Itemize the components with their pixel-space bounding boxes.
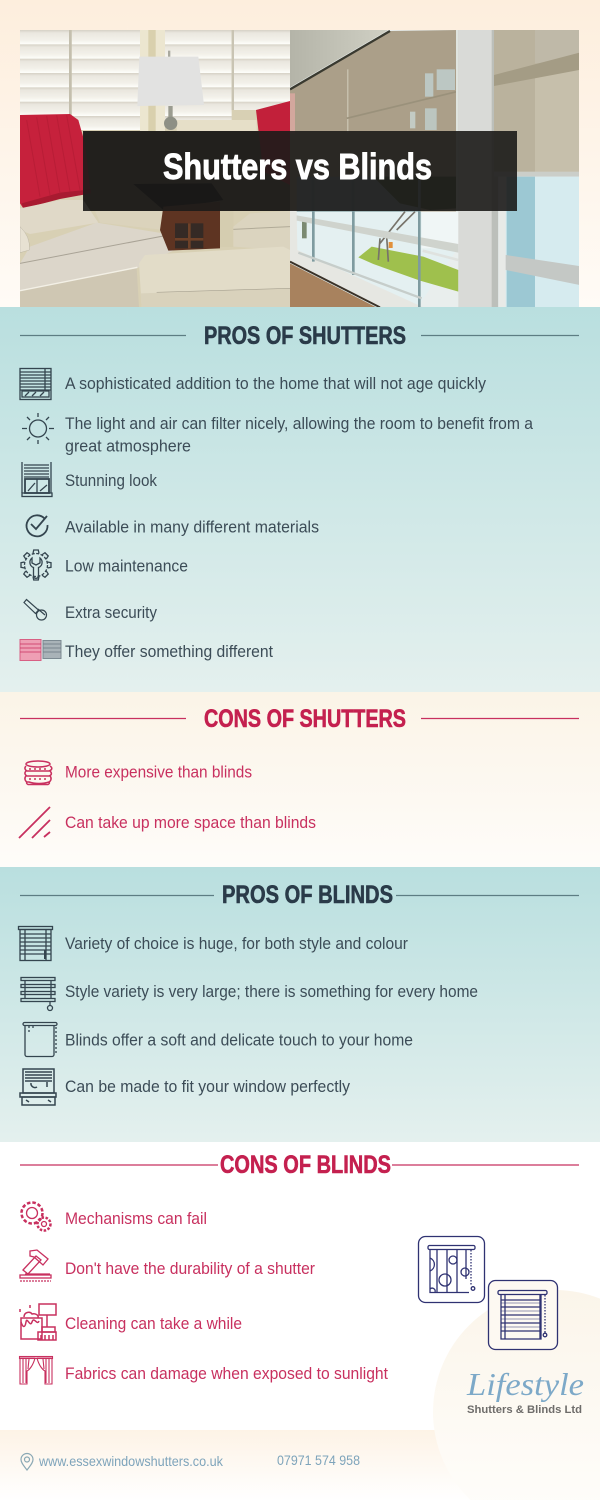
text: great atmosphere: great atmosphere: [65, 438, 191, 456]
icon: sun: [22, 413, 54, 444]
icon: shutter: [20, 368, 51, 400]
icon: key: [24, 600, 46, 620]
icon: venetian blind: [18, 926, 52, 960]
title bar: [83, 131, 517, 211]
panel: hero header: [0, 0, 600, 308]
text: website: www.essexwindowshutters.co.uk: [38, 1453, 224, 1469]
panel: footer: [0, 1430, 600, 1500]
text: something different: They offer something different: [65, 643, 273, 661]
text: more expensive: More expensive than blinds: [65, 764, 252, 782]
text: extra security: Extra security: [65, 604, 158, 622]
text: takes more space: Can take up more space than blinds: [65, 814, 316, 832]
text: durability: Don't have the durability of a shutter: [65, 1260, 315, 1278]
hero photo: blinds window: [290, 30, 579, 308]
icon: slatted blind: [21, 978, 55, 1010]
icon: roller blind: [23, 1022, 57, 1056]
icon: pink and grey shutters: [20, 640, 61, 660]
logo tagline: Shutters & Blinds Ltd: [467, 1404, 582, 1416]
icon: diagonal slashes: [19, 807, 50, 838]
icon: location pin: [21, 1454, 33, 1470]
logo script: Lifestyle: [466, 1366, 584, 1402]
text: available materials: Available in many different materials: [65, 518, 319, 536]
icon: gears: [22, 1202, 50, 1230]
text: soft and delicate: Blinds offer a soft and delicate touch to your home: [65, 1032, 413, 1050]
text: light and air: The light and air can filter nicely, allowing the room to benefit from a: [65, 415, 534, 433]
heading: pros of blinds: PROS OF BLINDS: [222, 881, 393, 909]
icon: window with blind: [20, 1069, 56, 1105]
text: cleaning: Cleaning can take a while: [65, 1315, 242, 1333]
icon: coins: [25, 761, 52, 784]
text: style variety: Style variety is very large; there is something for every home: [65, 983, 478, 1001]
text: low maintenance: Low maintenance: [65, 558, 188, 576]
icon: check mark: [27, 515, 48, 536]
text: variety of choice: Variety of choice is huge, for both style and colour: [65, 935, 408, 953]
text: stunning look: Stunning look: [65, 472, 158, 490]
icon: cleaning supplies: [20, 1304, 56, 1340]
decorative logo backdrop circle: [433, 1290, 600, 1500]
icon: curtains: [20, 1356, 52, 1384]
icon: window with shutter: [22, 462, 52, 496]
icon: gear and wrench: [21, 550, 51, 580]
panel: pros of shutters: [0, 307, 600, 692]
panel: cons of blinds: [0, 1142, 600, 1430]
heading: cons of blinds: CONS OF BLINDS: [220, 1151, 391, 1179]
text: phone: 07971 574 958: [277, 1452, 360, 1468]
text: mechanisms fail: Mechanisms can fail: [65, 1210, 207, 1228]
icon card: zebra blind: [488, 1280, 558, 1350]
heading: pros of shutters: PROS OF SHUTTERS: [204, 322, 406, 350]
text: fabrics: Fabrics can damage when exposed to sunlight: [65, 1365, 388, 1383]
text: made to fit: Can be made to fit your window perfectly: [65, 1078, 351, 1096]
panel: pros of blinds: [0, 867, 600, 1142]
logo: [466, 1366, 584, 1416]
icon card: patterned blind: [418, 1236, 484, 1302]
heading: cons of shutters: CONS OF SHUTTERS: [204, 705, 406, 733]
text: sophisticated addition: A sophisticated addition to the home that will not age quickly: [65, 375, 487, 393]
icon: hammer: [20, 1250, 51, 1281]
hero photo: shutters room: [20, 30, 290, 307]
title: Shutters vs Blinds: [163, 146, 432, 187]
panel: cons of shutters: [0, 692, 600, 867]
